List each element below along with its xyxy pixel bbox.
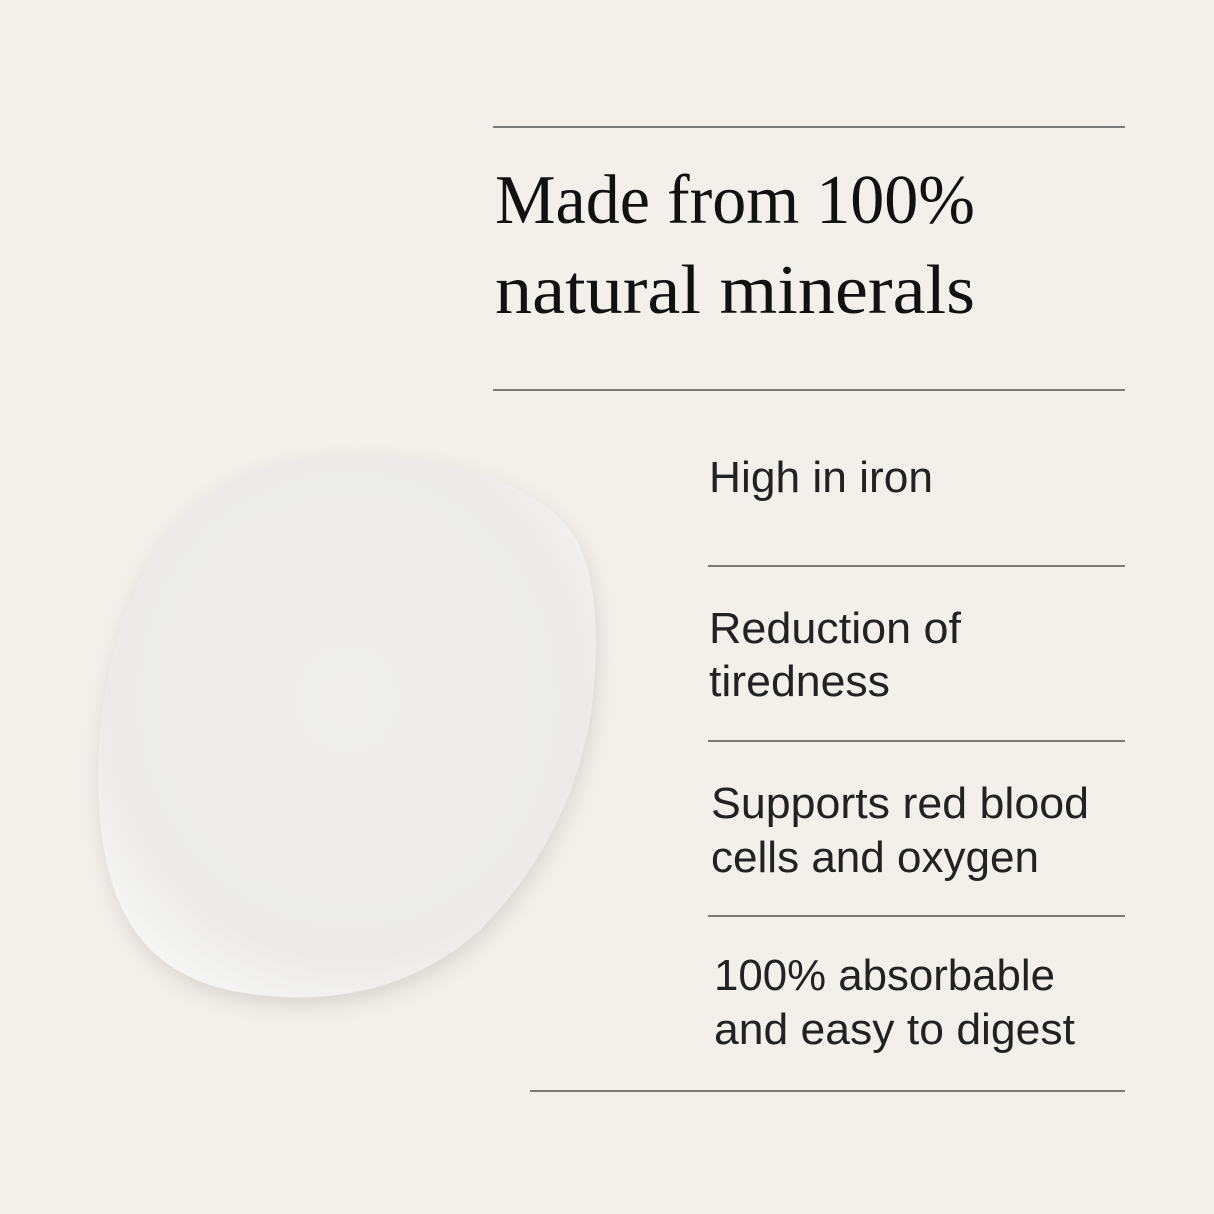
benefit: absorbable: and easy to digest — [714, 1005, 1075, 1054]
dividers — [493, 127, 1125, 1091]
icon: mineral blob — [98, 455, 598, 1005]
benefit: absorbable — [714, 951, 1075, 1054]
benefit: tiredness: Reduction of — [709, 604, 962, 653]
benefit: red blood cells: Supports red blood — [711, 779, 1089, 828]
title — [495, 162, 975, 329]
title: natural minerals — [495, 252, 975, 329]
benefit: red blood cells: cells and oxygen — [711, 833, 1039, 882]
benefit: tiredness — [709, 604, 962, 706]
benefit: red blood cells — [711, 779, 1089, 882]
benefit list — [709, 453, 1089, 1054]
title: Made from 100% — [495, 162, 975, 239]
benefit: tiredness: tiredness — [709, 657, 890, 706]
benefit: iron: High in iron — [709, 453, 933, 502]
benefit: absorbable: 100% absorbable — [714, 951, 1055, 1000]
